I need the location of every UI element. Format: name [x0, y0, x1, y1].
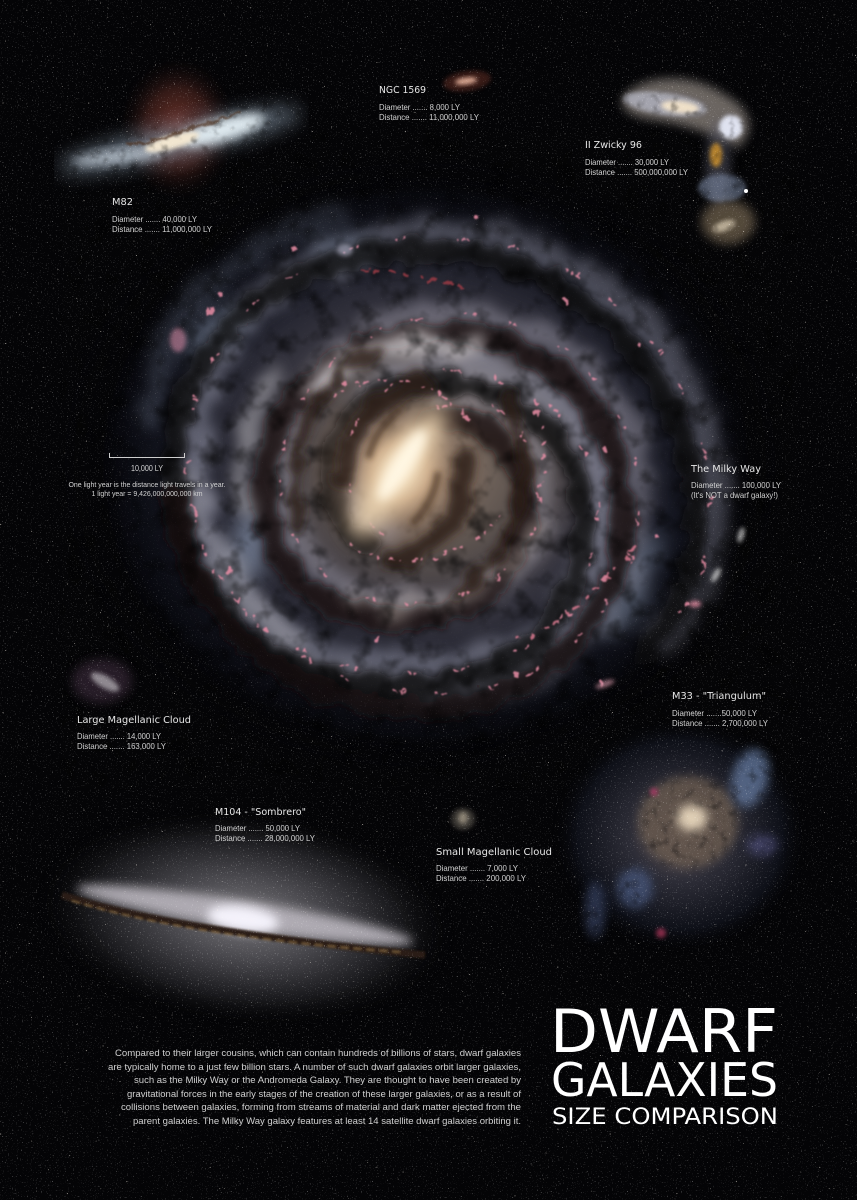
bright nebula patches — [170, 244, 746, 690]
label: M33 — [672, 691, 769, 728]
label: NGC 1569 — [379, 85, 480, 122]
galaxy: Milky Way — [60, 130, 800, 790]
label: M104: Distance ....... 28,000,000 LY — [215, 834, 315, 843]
label: M82: M82 — [112, 197, 133, 208]
description paragraph: parent galaxies. The Milky Way galaxy features at least 14 satellite dwarf galaxies orbiting it. — [133, 1115, 521, 1126]
scale bar — [68, 453, 226, 498]
label: Small Magellanic Cloud: Distance ....... 200,000 LY — [436, 874, 527, 883]
label: The Milky Way: Diameter ....... 100,000 LY — [691, 481, 782, 490]
title — [550, 997, 778, 1130]
galaxy: M82 — [55, 56, 305, 200]
label: Small Magellanic Cloud: Diameter ....... 7,000 LY — [436, 864, 519, 873]
description paragraph — [108, 1047, 521, 1126]
galaxy: M33 Triangulum — [552, 717, 808, 953]
label: Large Magellanic Cloud: Large Magellanic Cloud — [77, 715, 191, 726]
label: The Milky Way: The Milky Way — [690, 464, 761, 475]
description paragraph: Compared to their larger cousins, which can contain hundreds of billions of stars, dwarf galaxies — [115, 1047, 521, 1058]
disk and arms — [60, 130, 800, 790]
scale bar: 10,000 LY — [131, 464, 163, 473]
label: M82 — [112, 197, 213, 234]
inner dust lanes — [295, 352, 523, 592]
label: The Milky Way: (It's NOT a dwarf galaxy!) — [691, 491, 778, 500]
scale bar: 1 light year = 9,426,000,000,000 km — [92, 489, 202, 498]
label: II Zwicky 96: II Zwicky 96 — [585, 140, 642, 151]
label: II Zwicky 96: Diameter ....... 30,000 LY — [585, 158, 669, 167]
description paragraph: are typically home to a just few billion stars. A number of such dwarf galaxies orbit larger galaxies, — [108, 1061, 521, 1072]
galaxy: II Zwicky 96 — [622, 79, 755, 244]
label: M104 — [215, 807, 315, 843]
label: M82: Distance ....... 11,000,000 LY — [112, 225, 213, 234]
pink star-forming regions — [188, 216, 711, 694]
label: Large Magellanic Cloud: Diameter ....... 14,000 LY — [77, 732, 161, 741]
label: M33: Distance ....... 2,700,000 LY — [672, 719, 769, 728]
galaxy: Large Magellanic Cloud — [72, 659, 132, 703]
label: II Zwicky 96 — [585, 140, 688, 177]
label: NGC 1569: Diameter ....... 8,000 LY — [379, 103, 461, 112]
galactic bulge — [308, 380, 492, 564]
galaxy: Small Magellanic Cloud — [451, 808, 475, 830]
description paragraph: collisions between galaxies, forming from streams of material and dark matter ejected from the — [121, 1101, 521, 1112]
label: M82: Diameter ....... 40,000 LY — [112, 215, 197, 224]
scale bar: One light year is the distance light travels in a year. — [68, 480, 226, 489]
label: M33: Diameter .......50,000 LY — [672, 709, 758, 718]
label: The Milky Way — [690, 464, 782, 500]
label: II Zwicky 96: Distance ....... 500,000,000 LY — [585, 168, 688, 177]
label: NGC 1569: Distance ....... 11,000,000 LY — [379, 113, 480, 122]
galaxy: M104 Sombrero — [25, 789, 465, 1047]
title: SIZE COMPARISON — [552, 1105, 778, 1130]
label: M33: M33 - "Triangulum" — [672, 691, 766, 702]
galaxy: NGC 1569 — [442, 68, 492, 94]
galactic bar — [337, 397, 459, 547]
label: Small Magellanic Cloud: Small Magellanic Cloud — [436, 847, 552, 858]
label: Large Magellanic Cloud — [77, 715, 191, 751]
title: DWARF — [550, 997, 778, 1067]
label: Large Magellanic Cloud: Distance ....... 163,000 LY — [77, 742, 167, 751]
label: M104: M104 - "Sombrero" — [215, 807, 306, 818]
description paragraph: such as the Milky Way or the Andromeda Galaxy. They are thought to have been created by — [134, 1074, 521, 1085]
title: GALAXIES — [551, 1053, 778, 1107]
label: M104: Diameter ....... 50,000 LY — [215, 824, 300, 833]
label: Small Magellanic Cloud — [436, 847, 552, 883]
description paragraph: gravitational forces in the early stages of the creation of these larger galaxies, or as a result of — [127, 1088, 521, 1099]
label: NGC 1569: NGC 1569 — [379, 85, 426, 96]
